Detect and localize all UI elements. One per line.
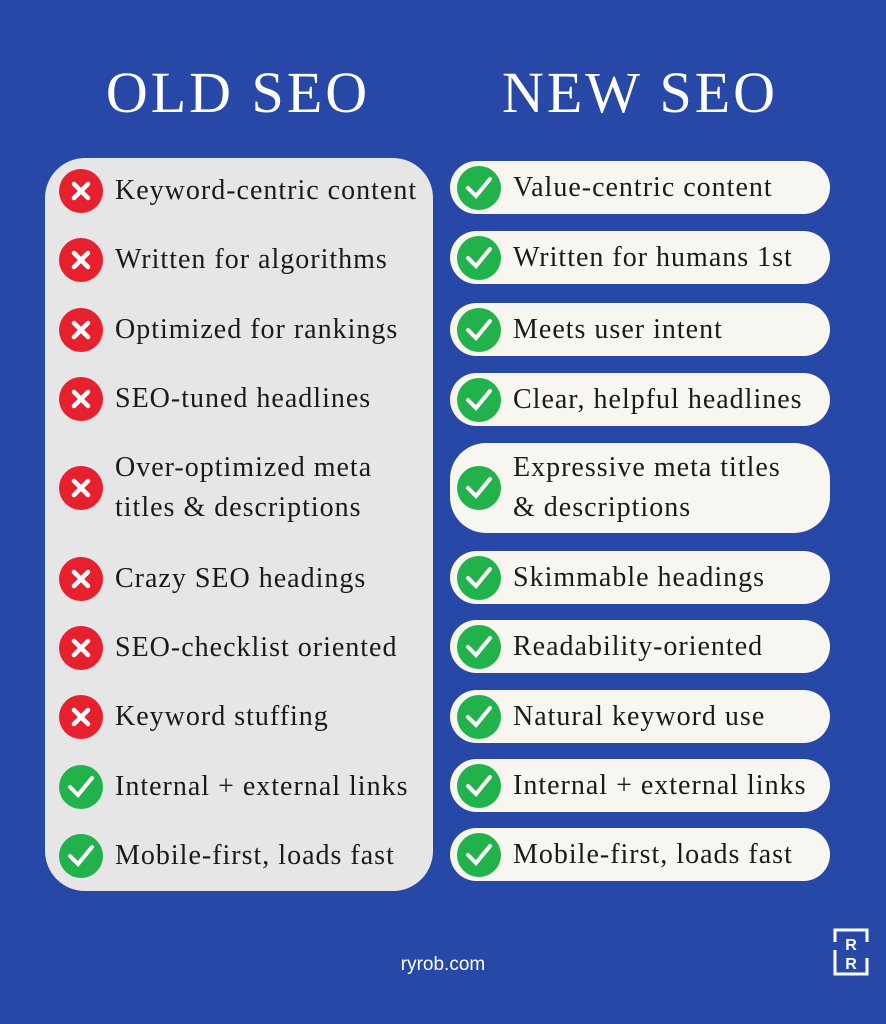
- pill: Readability-oriented: [513, 630, 763, 662]
- pill: [450, 828, 830, 881]
- pill: [450, 759, 830, 812]
- pill: Expressive meta titles: [513, 452, 781, 483]
- item: [59, 557, 366, 601]
- title: new seo: NEW SEO: [502, 60, 778, 125]
- pill: [450, 303, 830, 356]
- item: [59, 169, 417, 213]
- item: Internal + external links: [115, 771, 408, 802]
- icon: logo: R: [845, 937, 857, 954]
- item: Written for algorithms: [115, 244, 388, 275]
- pill: Value-centric content: [513, 172, 773, 202]
- pill: [450, 373, 830, 426]
- pill: Mobile-first, loads fast: [513, 838, 793, 870]
- item: [59, 238, 388, 282]
- panel: old seo list: [45, 158, 433, 891]
- pill: Meets user intent: [513, 314, 723, 344]
- footer url: ryrob.com: [401, 954, 485, 975]
- pill: [450, 620, 830, 673]
- item: titles & descriptions: [115, 492, 362, 523]
- pill: Internal + external links: [513, 770, 806, 800]
- item: [59, 452, 372, 523]
- item: SEO-tuned headlines: [115, 383, 371, 414]
- item: [59, 626, 397, 670]
- item: Keyword-centric content: [115, 175, 417, 206]
- item: SEO-checklist oriented: [115, 632, 397, 663]
- pill: [450, 443, 830, 533]
- pill: [450, 551, 830, 604]
- icon: logo: [834, 928, 868, 976]
- item: [59, 765, 408, 809]
- item: [59, 834, 395, 878]
- pill: [450, 161, 830, 214]
- pill: Skimmable headings: [513, 562, 765, 592]
- item: Crazy SEO headings: [115, 563, 366, 594]
- pill: & descriptions: [513, 492, 691, 523]
- item: [59, 695, 329, 739]
- icon: logo: R: [845, 956, 857, 973]
- pill: Written for humans 1st: [513, 242, 793, 272]
- item: Mobile-first, loads fast: [115, 840, 395, 871]
- pill: [450, 231, 830, 284]
- item: Optimized for rankings: [115, 314, 398, 345]
- pill: Natural keyword use: [513, 700, 765, 732]
- pill: Clear, helpful headlines: [513, 384, 803, 414]
- item: [59, 308, 398, 352]
- item: Keyword stuffing: [115, 701, 329, 732]
- item: [59, 377, 371, 421]
- title: old seo: OLD SEO: [106, 60, 370, 125]
- item: Over-optimized meta: [115, 452, 372, 483]
- pill: [450, 690, 830, 743]
